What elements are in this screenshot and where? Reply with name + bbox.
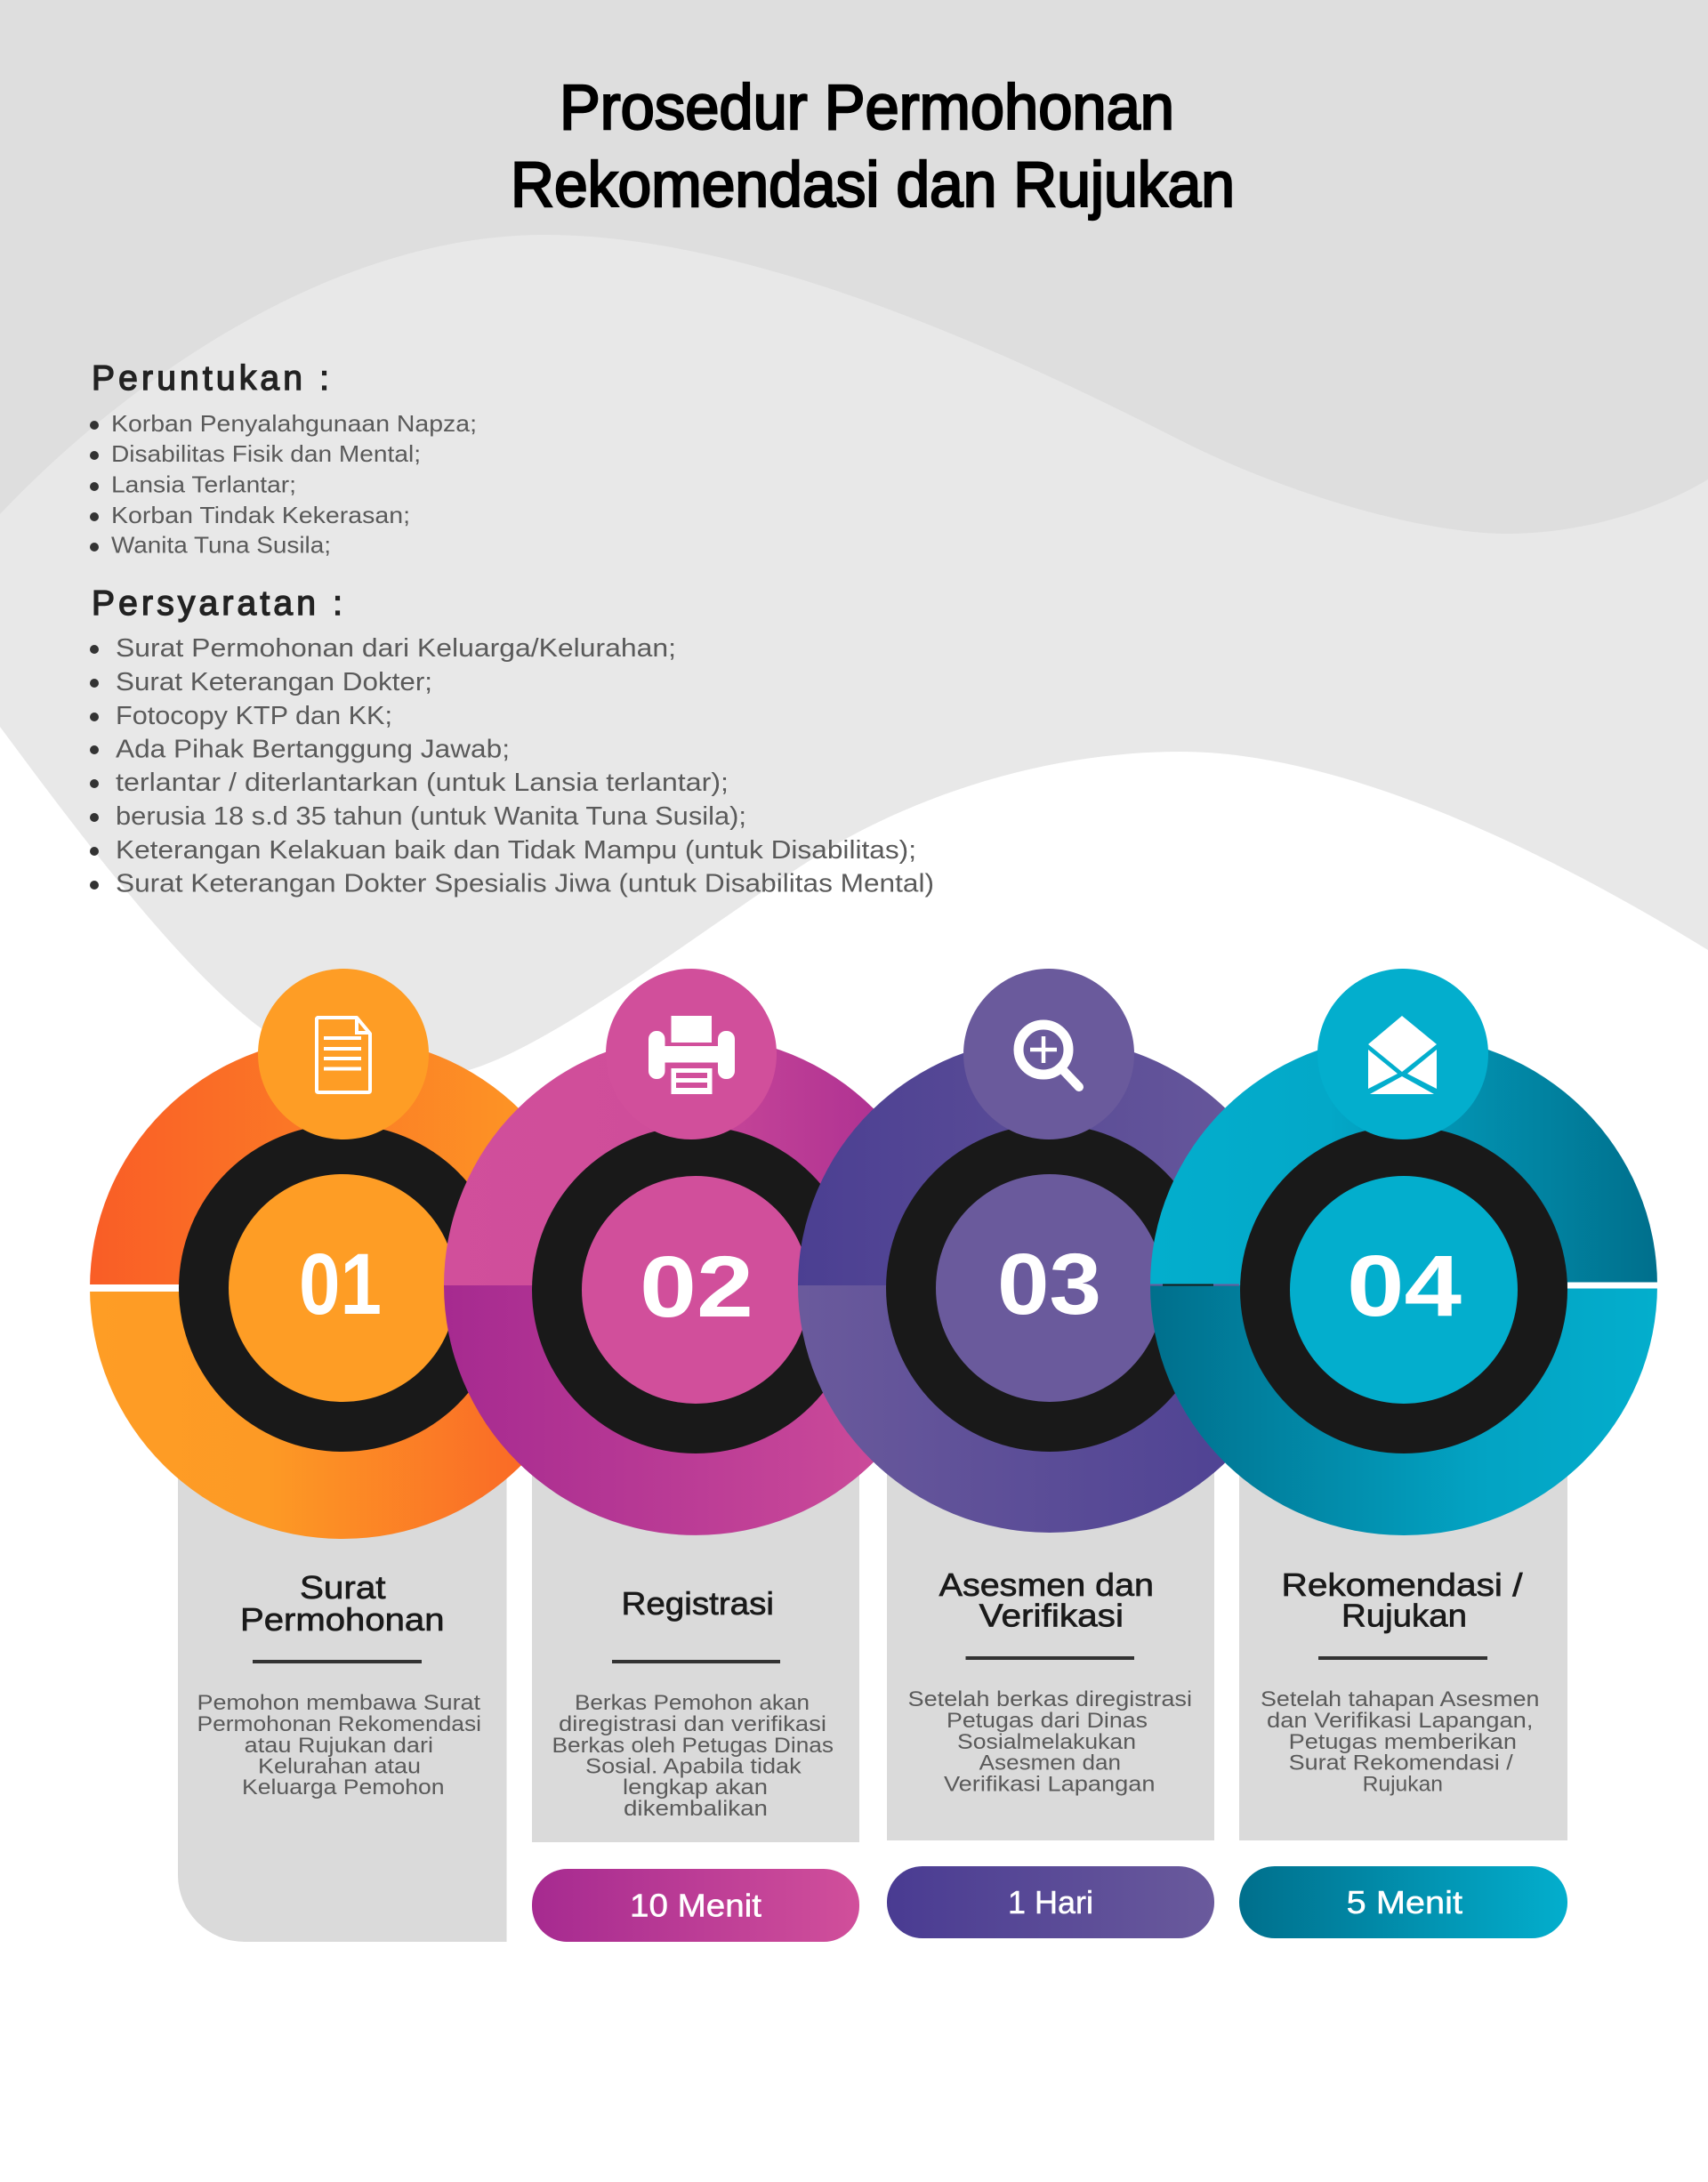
card 3: Asesmen dan Verifikasi [887, 1423, 1214, 1840]
card 1 description [197, 1691, 481, 1800]
duration pill: 5 Menit [1239, 1866, 1567, 1938]
step circle 03 [798, 969, 1301, 1533]
list: Persyaratan: Surat Keterangan Dokter Spesialis Jiwa (untuk Disabilitas Mental) [116, 870, 934, 898]
card 4 heading [1281, 1566, 1523, 1633]
card 3 description: Asesmen dan [979, 1751, 1121, 1775]
card 2 description: diregistrasi dan verifikasi [559, 1712, 826, 1736]
duration pill: 10 Menit [532, 1869, 859, 1942]
card 3 heading [939, 1566, 1154, 1633]
card 2 description: Berkas oleh Petugas Dinas [552, 1734, 834, 1758]
list: Persyaratan: Keterangan Kelakuan baik dan Tidak Mampu (untuk Disabilitas); [116, 836, 916, 865]
card 1 heading: Permohonan [240, 1601, 445, 1638]
duration pill: 1 Hari: 1 Hari [1008, 1884, 1093, 1920]
card 2 heading: Registrasi [621, 1585, 774, 1622]
card 2 description: dikembalikan [624, 1797, 768, 1821]
title [511, 73, 1235, 221]
title: Prosedur Permohonan [560, 73, 1174, 143]
number 04: 04 [1347, 1237, 1462, 1334]
duration pill: 10 Menit: 10 Menit [630, 1888, 761, 1923]
step circle 02 [444, 969, 947, 1535]
card 3 description: Setelah berkas diregistrasi [907, 1687, 1192, 1711]
step circle 01 [90, 969, 595, 1539]
duration pill: 1 Hari [887, 1866, 1214, 1938]
background: light grey wave [0, 235, 1708, 1103]
card 1 description: atau Rujukan dari [245, 1734, 433, 1758]
card 4 description: Setelah tahapan Asesmen [1261, 1687, 1539, 1711]
number 01: 01 [299, 1236, 382, 1333]
icon: printer [649, 1016, 735, 1094]
number 02: 02 [640, 1238, 753, 1335]
list: Persyaratan: berusia 18 s.d 35 tahun (untuk Wanita Tuna Susila); [116, 802, 746, 831]
list: Persyaratan: Surat Keterangan Dokter; [116, 668, 432, 696]
card 1 description: Pemohon membawa Surat [197, 1691, 480, 1715]
card 4 description [1261, 1687, 1539, 1797]
card 3 heading: Verifikasi [979, 1598, 1124, 1633]
card 3 heading: Asesmen dan [939, 1566, 1154, 1603]
card 2 description: lengkap akan [623, 1775, 768, 1800]
list: Peruntukan: Disabilitas Fisik dan Mental; [111, 440, 421, 467]
card 3 description: Sosialmelakukan [957, 1730, 1136, 1754]
icon: magnifier [1019, 1025, 1079, 1087]
list: Persyaratan: Surat Permohonan dari Keluarga/Kelurahan; [116, 634, 676, 663]
list: Persyaratan: Ada Pihak Bertanggung Jawab; [116, 735, 510, 763]
card 1 heading [240, 1569, 445, 1638]
card 2 description: Berkas Pemohon akan [575, 1691, 810, 1715]
number 03: 03 [997, 1236, 1101, 1333]
icon: document [317, 1018, 370, 1092]
card 3 description [907, 1687, 1192, 1797]
card 4 description: dan Verifikasi Lapangan, [1267, 1709, 1534, 1733]
card 1 heading: Surat [300, 1569, 386, 1606]
card 3 description: Verifikasi Lapangan [944, 1772, 1155, 1797]
title: Rekomendasi dan Rujukan [511, 150, 1235, 221]
duration pill: 5 Menit: 5 Menit [1347, 1884, 1462, 1920]
heading: Peruntukan: Peruntukan : [92, 359, 329, 398]
list: Peruntukan: Wanita Tuna Susila; [111, 532, 331, 559]
list: Peruntukan [90, 410, 477, 559]
card 1: Surat Permohonan [178, 1423, 507, 1942]
background: dark grey top area [0, 0, 1708, 1103]
card 4 heading: Rekomendasi / [1281, 1566, 1523, 1603]
card 4 description: Rujukan [1363, 1772, 1443, 1797]
card 4 description: Petugas memberikan [1289, 1730, 1517, 1754]
card 4 description: Surat Rekomendasi / [1289, 1751, 1513, 1775]
list: Persyaratan: terlantar / diterlantarkan (untuk Lansia terlantar); [116, 769, 729, 797]
card 3 description: Petugas dari Dinas [947, 1709, 1148, 1733]
list: Peruntukan: Korban Penyalahgunaan Napza; [111, 410, 477, 437]
card 1 description: Permohonan Rekomendasi [197, 1712, 481, 1736]
heading: Persyaratan: Persyaratan : [92, 584, 342, 623]
icon: open envelope [1368, 1016, 1437, 1094]
card 2 description [552, 1691, 834, 1821]
card 1 description: Keluarga Pemohon [242, 1775, 445, 1800]
list: Peruntukan: Korban Tindak Kekerasan; [111, 502, 410, 528]
background: white lower wave [0, 727, 1708, 1156]
card 2: Registrasi [532, 1423, 859, 1842]
card 1 description: Kelurahan atau [258, 1754, 421, 1779]
card 4: Rekomendasi / Rujukan [1239, 1423, 1567, 1840]
list: Peruntukan: Lansia Terlantar; [111, 471, 296, 498]
card 4 heading: Rujukan [1341, 1598, 1467, 1633]
step circle 04 [1150, 969, 1657, 1535]
list: Persyaratan [90, 634, 934, 898]
card 2 description: Sosial. Apabila tidak [585, 1754, 802, 1779]
list: Persyaratan: Fotocopy KTP dan KK; [116, 702, 392, 730]
